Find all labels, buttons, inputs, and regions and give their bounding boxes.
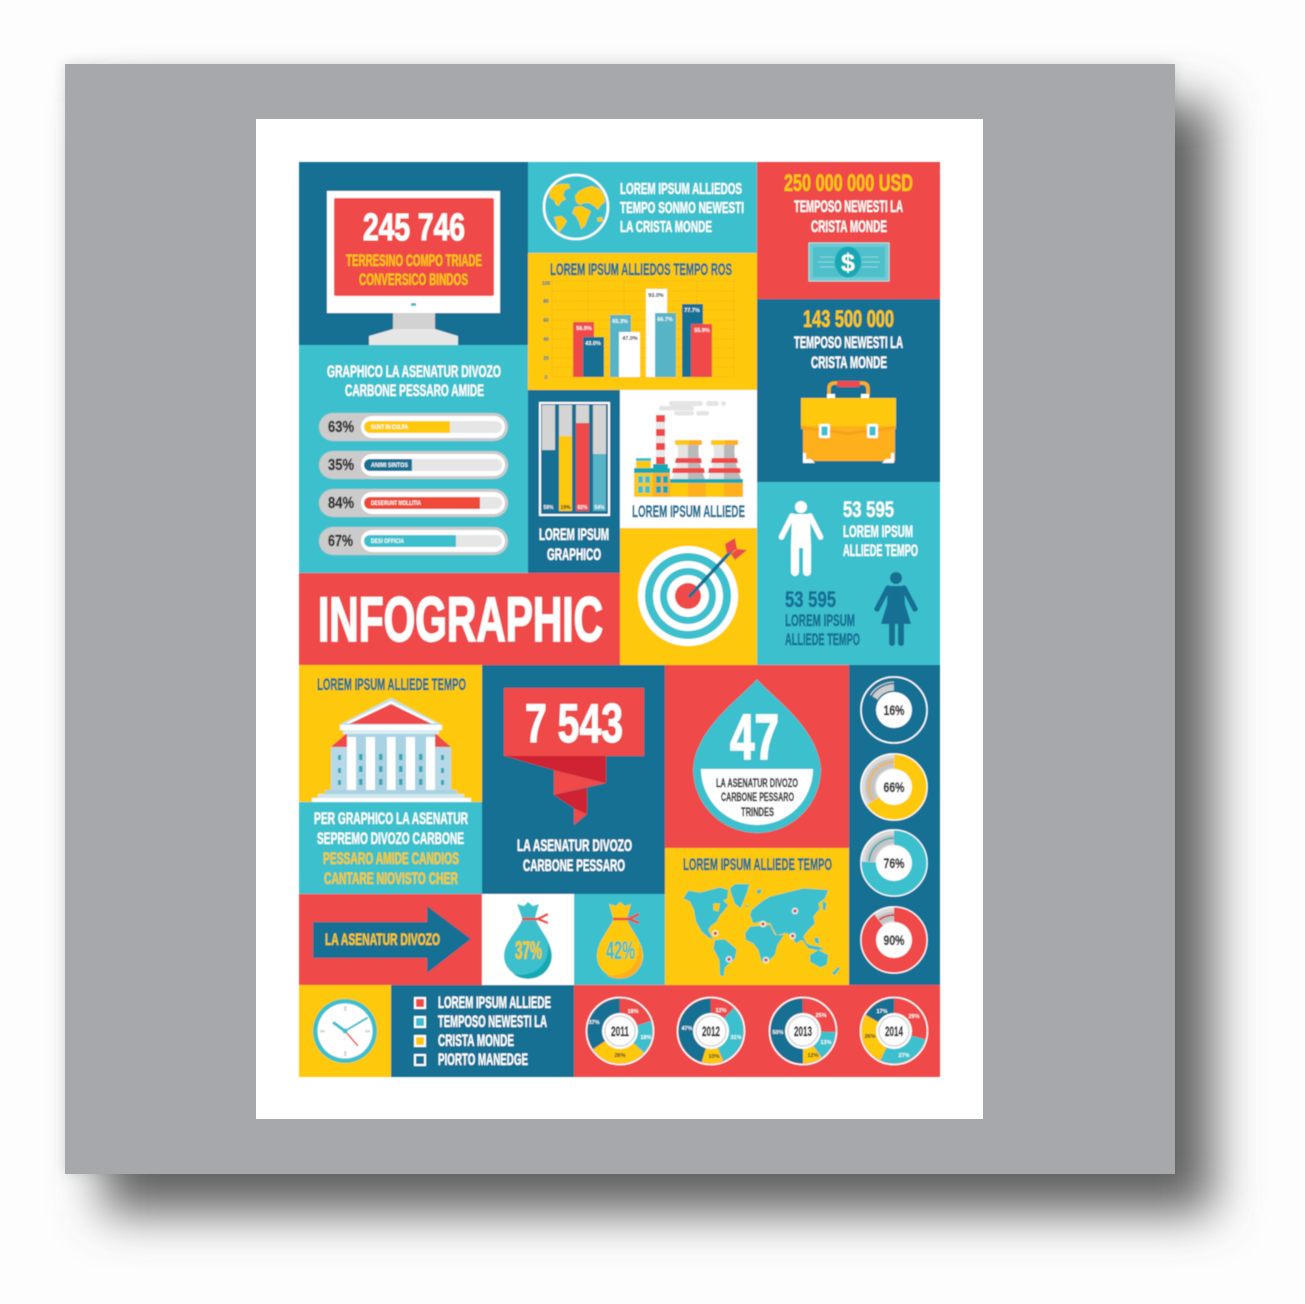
panel: yearly pies <box>574 985 940 1077</box>
vertical bars caption: GRAPHICO <box>547 545 601 564</box>
pie 2014: 27% <box>898 1053 910 1059</box>
globe text: TEMPO SONMO NEWESTI <box>620 200 744 217</box>
icon: classical building <box>312 698 471 802</box>
chart grid <box>552 281 734 377</box>
icon: man <box>782 501 820 576</box>
briefcase amount: 143 500 000 <box>803 306 894 333</box>
vertical bars <box>542 405 606 511</box>
man stat: 53 595 <box>843 497 894 522</box>
woman stat: 53 595 <box>785 587 836 612</box>
drop caption <box>716 776 798 819</box>
grey board <box>65 64 1175 1174</box>
legend labels: TEMPOSO NEWESTI LA <box>438 1012 547 1031</box>
pie 2012: 47% <box>681 1026 693 1032</box>
icon: target <box>638 546 738 646</box>
donut 76% <box>861 830 927 896</box>
chart bar labels: 47.0% <box>622 336 638 342</box>
poster content <box>299 162 940 1077</box>
donut 66% <box>859 752 929 822</box>
panel: percent donuts <box>849 665 940 985</box>
monitor frame <box>327 191 500 313</box>
monitor light <box>411 303 416 306</box>
icon: monitor stand <box>369 313 458 345</box>
pie 2011: 2011 <box>611 1023 629 1039</box>
legend labels: CRISTA MONDE <box>438 1031 514 1050</box>
pie 2012: 31% <box>730 1035 742 1041</box>
panel: ribbon number <box>482 665 665 894</box>
chart axis labels: 100 <box>542 281 550 287</box>
chart bar labels: 65.3% <box>612 319 628 325</box>
man stat: LOREM IPSUM <box>843 522 913 541</box>
woman stat: LOREM IPSUM <box>785 611 855 630</box>
icon: clock <box>313 999 377 1063</box>
chart bar labels: 43.0% <box>585 341 601 347</box>
progress heading: GRAPHICO LA ASENATUR DIVOZO <box>327 362 501 381</box>
ribbon caption: CARBONE PESSARO <box>523 856 625 875</box>
icon: teal bag <box>504 902 552 979</box>
pie 2013 <box>768 996 838 1066</box>
pie 2012: 10% <box>708 1054 720 1060</box>
monitor caption: CONVERSICO BINDOS <box>359 270 468 289</box>
donut 16% <box>857 673 931 747</box>
man stat <box>843 497 918 560</box>
pie 2011: 18% <box>640 1035 652 1041</box>
title banner <box>299 573 620 665</box>
chart axis labels: 0 <box>545 375 548 381</box>
donut 90% <box>859 905 929 975</box>
panel: building text: PESSARO AMIDE CANDIOS <box>323 849 459 868</box>
ribbon number: 7 543 <box>525 692 623 754</box>
chart axis labels: 80 <box>543 299 549 305</box>
map heading: LOREM IPSUM ALLIEDE TEMPO <box>683 856 832 874</box>
pie 2014: 29% <box>908 1014 920 1020</box>
panel: drop <box>665 665 849 848</box>
monitor caption <box>346 251 482 289</box>
chart bar labels: 55.9% <box>694 328 710 334</box>
icon: water drop <box>693 679 821 833</box>
panel: building text: CANTARE NIOVISTO CHER <box>324 869 458 888</box>
briefcase caption <box>794 333 903 372</box>
money caption: TEMPOSO NEWESTI LA <box>794 197 903 216</box>
woman stat: ALLIEDE TEMPO <box>785 630 860 649</box>
woman stat <box>785 587 860 649</box>
progress heading: CARBONE PESSARO AMIDE <box>345 381 484 400</box>
icon: woman <box>877 572 915 646</box>
monitor caption: TERRESINO COMPO TRIADE <box>346 251 482 270</box>
briefcase caption: CRISTA MONDE <box>811 353 887 372</box>
panel: money bag 37% <box>482 894 574 985</box>
briefcase caption: TEMPOSO NEWESTI LA <box>794 333 903 352</box>
pie 2012 <box>676 996 746 1066</box>
chart bars <box>573 289 712 377</box>
monitor number: 245 746 <box>363 207 465 249</box>
legend labels: PIORTO MANEDGE <box>438 1050 528 1069</box>
icon: factory building <box>634 458 743 497</box>
panel: world map <box>665 848 849 985</box>
chart bar labels: 56.9% <box>576 326 592 332</box>
panel: briefcase <box>757 299 940 482</box>
panel: building text: SEPREMO DIVOZO CARBONE <box>317 829 464 848</box>
legend swatches <box>415 998 425 1065</box>
ribbon caption: LA ASENATUR DIVOZO <box>517 836 632 855</box>
panel: building text <box>299 802 482 894</box>
progress row 63%: SUNT IN CULPA <box>371 425 409 431</box>
pie 2013: 25% <box>815 1013 827 1019</box>
progress heading <box>327 362 501 400</box>
building heading: LOREM IPSUM ALLIEDE TEMPO <box>317 676 466 694</box>
pie 2013: 2013 <box>794 1023 812 1039</box>
map pins <box>712 908 798 963</box>
icon: chimney <box>656 415 665 465</box>
donut 76%: 76% <box>884 855 905 871</box>
chart axis labels: 60 <box>543 318 549 324</box>
icon: yellow bag <box>597 902 643 979</box>
pie 2014: 2014 <box>885 1023 903 1039</box>
legend labels <box>438 993 551 1069</box>
progress row 84%: 84% <box>328 495 354 512</box>
icon: globe <box>544 175 608 239</box>
vertical bar values: 19% <box>560 505 571 511</box>
panel: target <box>620 528 757 665</box>
icon: banknote <box>809 243 889 281</box>
globe text: LOREM IPSUM ALLIEDOS <box>620 181 742 198</box>
panel: vertical bars <box>528 390 620 573</box>
chart axis labels: 40 <box>543 337 549 343</box>
vertical bar values: 54% <box>594 505 605 511</box>
cast shadow of board <box>103 103 1213 1213</box>
chart bar labels: 93.0% <box>648 293 664 299</box>
drop caption: TRINDES <box>741 805 774 819</box>
progress row 35%: ANIMI SINTOS <box>371 463 408 469</box>
pie 2014 <box>860 997 928 1065</box>
pie 2011 <box>585 996 655 1066</box>
pie 2013: 12% <box>807 1053 819 1059</box>
chart bar labels <box>576 293 710 347</box>
pie 2014: 26% <box>864 1034 876 1040</box>
progress row 84% <box>319 489 508 517</box>
pie 2011: 37% <box>588 1020 600 1026</box>
white poster sheet <box>256 119 983 1119</box>
vertical bars caption: LOREM IPSUM <box>539 525 609 544</box>
donut 66%: 66% <box>884 779 905 795</box>
money caption <box>794 197 903 236</box>
vertical bar values: 59% <box>543 505 554 511</box>
icon: smoke <box>659 401 726 416</box>
progress row 63% <box>319 413 508 441</box>
vertical bar values <box>543 505 605 511</box>
panel: monitor <box>299 162 528 345</box>
progress row 67%: 67% <box>328 533 353 550</box>
panel: money <box>757 162 940 299</box>
progress row 63%: 63% <box>328 419 354 436</box>
chart axis labels <box>542 281 550 381</box>
vertical bar values: 82% <box>577 505 588 511</box>
pie 2013: 13% <box>820 1040 832 1046</box>
chart axis labels: 20 <box>543 356 549 362</box>
money amount: 250 000 000 USD <box>784 170 913 197</box>
legend labels: LOREM IPSUM ALLIEDE <box>438 993 551 1012</box>
panel: bar chart <box>528 253 757 390</box>
drop caption: LA ASENATUR DIVOZO <box>716 776 798 790</box>
monitor screen <box>334 198 494 296</box>
panel: clock <box>299 985 391 1077</box>
progress row 67% <box>319 527 508 555</box>
panel: arrow <box>299 894 482 985</box>
icon: briefcase <box>801 381 896 463</box>
panel: legend <box>391 985 574 1077</box>
progress row 35% <box>319 451 508 479</box>
icon: ribbon <box>504 688 644 825</box>
chart bar labels: 66.7% <box>657 317 673 323</box>
progress row 84%: DESERUNT MOLLITIA <box>371 501 422 507</box>
arrow text: LA ASENATUR DIVOZO <box>325 930 440 949</box>
bag value: 42% <box>606 937 635 965</box>
panel: building <box>299 665 482 802</box>
world map <box>683 884 840 977</box>
panel: money bag 42% <box>574 894 665 985</box>
vertical bars caption <box>539 525 609 564</box>
arrow shape <box>313 906 471 973</box>
donut 16%: 16% <box>884 702 905 718</box>
factory caption: LOREM IPSUM ALLIEDE <box>632 502 745 521</box>
ribbon caption <box>517 836 632 875</box>
pie 2012: 12% <box>715 1008 727 1014</box>
drop caption: CARBONE PESSARO <box>721 790 794 804</box>
icon: cooling towers <box>672 440 741 479</box>
panel: people <box>757 482 940 665</box>
pie 2013: 50% <box>772 1030 784 1036</box>
globe text <box>620 181 744 236</box>
pie 2012: 2012 <box>702 1023 720 1039</box>
drop white label <box>701 769 813 825</box>
drop number: 47 <box>730 701 779 773</box>
vertical bar frame <box>540 403 609 515</box>
icon: arrow in target <box>689 538 747 597</box>
pie 2014: 17% <box>876 1009 888 1015</box>
panel: globe <box>528 162 757 253</box>
progress row 67%: DESI OFFICIA <box>371 539 405 545</box>
bag value: 37% <box>515 937 542 965</box>
panel: building text: PER GRAPHICO LA ASENATUR <box>314 809 468 828</box>
light glow around board <box>65 64 1175 1174</box>
panel: progress bars <box>299 345 528 573</box>
man stat: ALLIEDE TEMPO <box>843 541 918 560</box>
progress row 35%: 35% <box>328 457 354 474</box>
pie 2011: 18% <box>627 1009 639 1015</box>
pie 2011: 26% <box>614 1053 626 1059</box>
money caption: CRISTA MONDE <box>811 217 887 236</box>
icon: banknote: $ <box>841 249 855 277</box>
panel: factory <box>620 390 757 528</box>
chart bar labels: 77.7% <box>684 308 700 314</box>
chart heading: LOREM IPSUM ALLIEDOS TEMPO ROS <box>550 260 732 279</box>
globe text: LA CRISTA MONDE <box>620 219 712 236</box>
donut 90%: 90% <box>884 932 905 948</box>
title banner: INFOGRAPHIC <box>318 585 603 655</box>
